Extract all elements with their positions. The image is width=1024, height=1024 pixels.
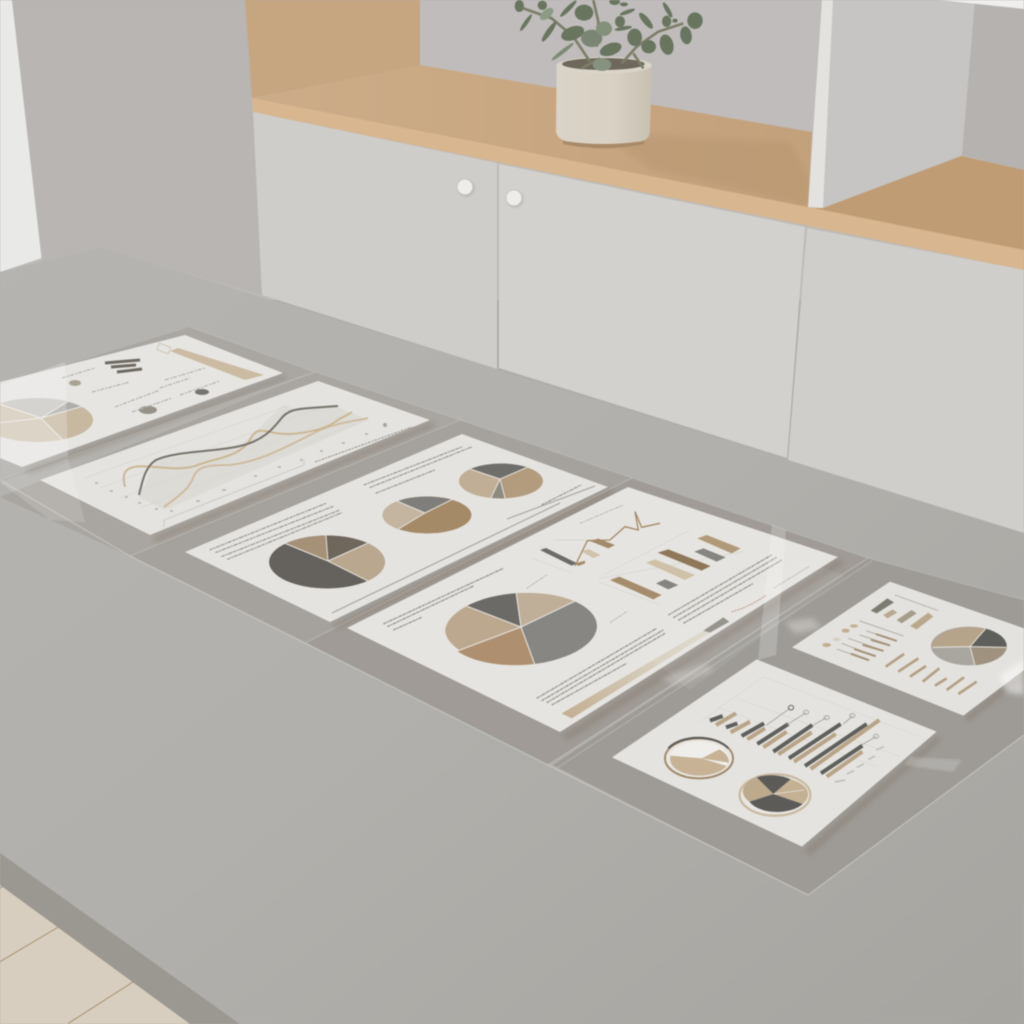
sheet 5: bars and pie	[792, 582, 1024, 716]
sheet 4: pie and bar charts	[347, 487, 838, 732]
tray 5	[553, 558, 1024, 895]
paragraph lines	[383, 505, 810, 705]
white shelf upright	[808, 0, 1024, 208]
middle pie	[382, 496, 472, 534]
top bars	[871, 595, 938, 629]
grouped bars	[710, 713, 879, 777]
sheet 6: grouped bars and two ring pies	[612, 659, 937, 847]
reddish note	[732, 595, 767, 612]
small stacked bars	[105, 360, 142, 372]
sheet 3: three pie charts	[185, 434, 608, 622]
wooden shelf	[252, 65, 1024, 270]
pie chart	[0, 398, 94, 442]
tan footer band	[562, 617, 729, 718]
grid lines and axis	[700, 677, 920, 777]
cabinet doors	[253, 112, 1024, 535]
tray 2	[0, 372, 460, 556]
large pie	[268, 534, 386, 590]
acrylic reflections	[0, 362, 1024, 772]
background wall and cabinetry	[0, 0, 1024, 535]
pie chart	[931, 627, 1007, 665]
wood cabinet side panel	[245, 0, 420, 98]
tan banner	[157, 343, 264, 380]
potted plant	[515, 0, 703, 148]
paragraph lines	[210, 447, 581, 559]
small icon groups	[62, 368, 220, 414]
charts, bars and text	[383, 505, 810, 718]
sheet 1: far pie and icons	[0, 335, 283, 470]
chart area and grid	[85, 405, 368, 527]
tray 4	[305, 478, 868, 765]
ring pie left	[665, 738, 733, 778]
main pie chart	[444, 592, 598, 666]
table top	[0, 247, 1024, 1024]
tray 3	[130, 420, 632, 643]
pot	[556, 57, 652, 148]
lower bar chart	[598, 530, 743, 605]
middle rows	[822, 621, 903, 660]
line series	[124, 406, 368, 507]
small bar cluster	[886, 654, 977, 694]
plant stems and leaves	[515, 0, 703, 71]
axis ticks and caption	[95, 423, 412, 511]
upper bar and line chart	[532, 512, 660, 573]
leader lines and markers	[767, 705, 884, 782]
ring pie right	[740, 774, 810, 816]
sheet 2: line chart	[40, 381, 430, 535]
tray 1	[0, 327, 315, 480]
right pie	[458, 462, 544, 499]
acrylic trays	[0, 327, 1024, 895]
table edge	[0, 853, 240, 1024]
floor	[0, 880, 197, 1024]
door knobs	[458, 180, 524, 208]
sheet shadows	[24, 375, 1024, 855]
footer rules	[332, 486, 595, 613]
